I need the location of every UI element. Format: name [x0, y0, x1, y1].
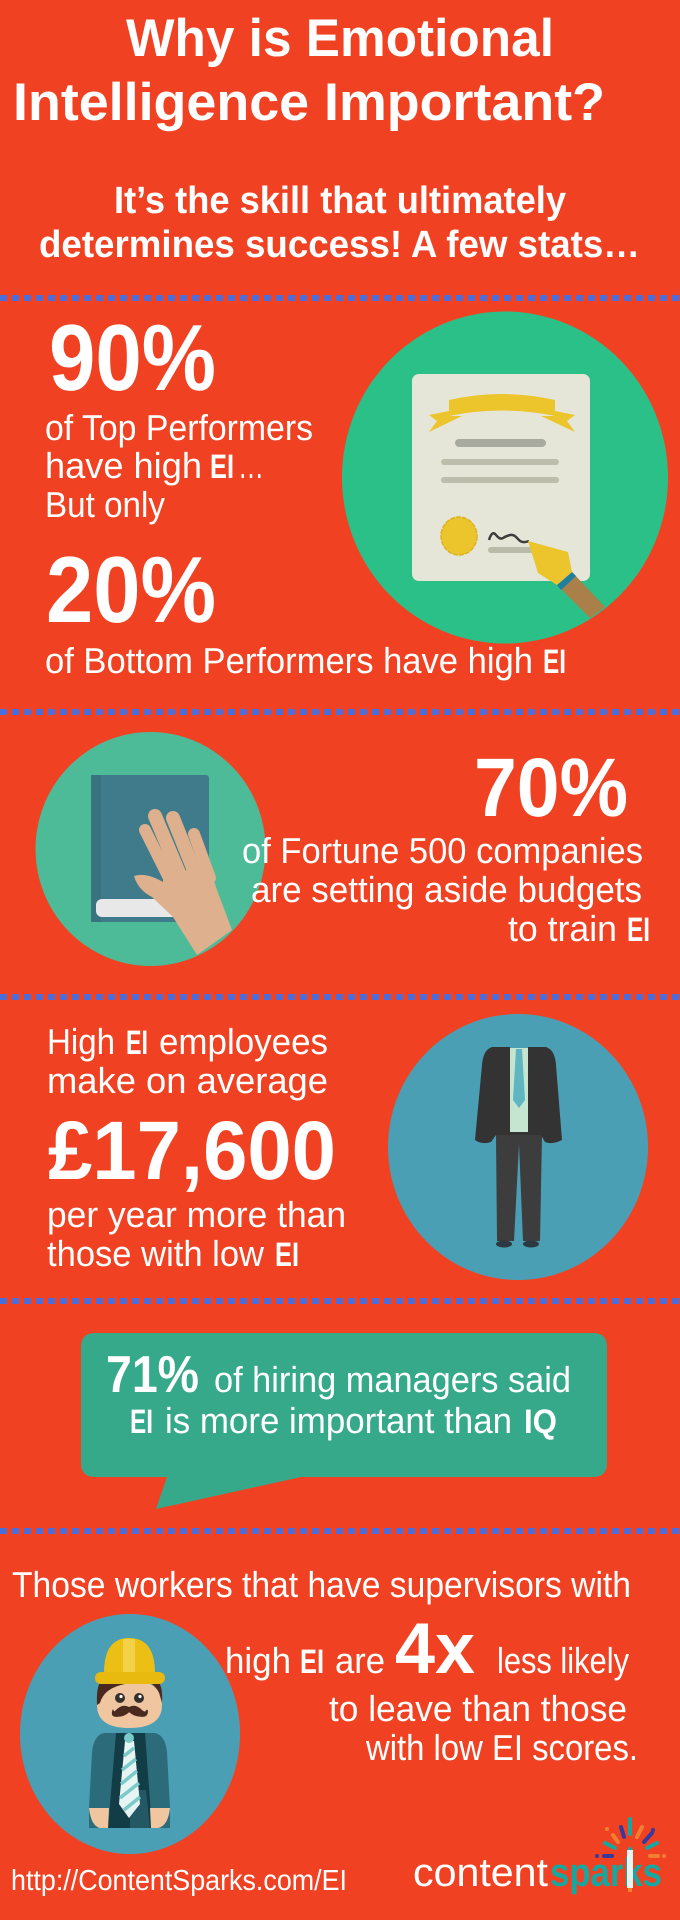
icon: construction worker in blue circle: [20, 1614, 240, 1854]
subtitle: [39, 180, 640, 266]
panel: top vs bottom performers text: [45, 305, 566, 681]
icon: suit in blue circle: [388, 1014, 648, 1280]
text: 4x less likely to leave: to leave than those: [329, 1688, 627, 1729]
text: website url: http://ContentSparks.com/EI: [11, 1865, 347, 1897]
text: of top performers: of Top Performers: [45, 407, 313, 448]
text: of top performers: have high: [45, 445, 202, 486]
text: of bottom performers: of Bottom Performers have high: [45, 640, 533, 681]
text: high EI employees: make on average: [47, 1060, 328, 1101]
title: Intelligence Important?: [13, 73, 605, 132]
text: high EI employees: [47, 1021, 328, 1101]
icon: hand on book in green circle: [36, 732, 266, 966]
text: of top performers: EI: [210, 448, 234, 486]
stat: 71%: 71%: [106, 1346, 199, 1404]
text: of top performers: [45, 407, 313, 525]
text: per year more: [47, 1194, 346, 1274]
callout: hiring managers speech bubble: of hiring managers said: [214, 1359, 571, 1400]
text: high EI employees: EI: [126, 1024, 148, 1062]
text: 4x less likely to leave: high: [225, 1640, 291, 1681]
text: fortune 500 budgets: are setting aside budgets: [251, 869, 642, 910]
stat: 70%: 70%: [474, 741, 628, 834]
text: 4x less likely to leave: are: [335, 1640, 385, 1681]
text: fortune 500 budgets: [242, 830, 650, 949]
callout: hiring managers speech bubble: is more important than: [165, 1400, 512, 1441]
panel: fortune 500 text: [242, 741, 650, 949]
callout: hiring managers speech bubble: EI: [130, 1403, 153, 1441]
stat: £17,600: £17,600: [48, 1104, 336, 1197]
logo: contentsparks: [413, 1819, 666, 1895]
text: supervisors intro line: Those workers that have supervisors with: [12, 1564, 631, 1605]
text: per year more: EI: [275, 1236, 299, 1274]
text: per year more: per year more than: [47, 1194, 346, 1235]
text: fortune 500 budgets: of Fortune 500 companies: [242, 830, 643, 871]
stat: 4x: 4x: [395, 1609, 475, 1689]
text: 4x less likely to leave: [225, 1609, 638, 1768]
callout: hiring managers speech bubble: IQ: [524, 1403, 557, 1441]
text: of bottom performers: EI: [543, 643, 566, 681]
text: fortune 500 budgets: to train: [508, 908, 617, 949]
subtitle: determines success! A few stats…: [39, 224, 640, 266]
stat: 20%: 20%: [46, 537, 216, 642]
text: fortune 500 budgets: EI: [627, 911, 650, 949]
title: Why is Emotional: [126, 9, 554, 68]
icon: certificate and pen in green circle: [342, 312, 668, 644]
title: [13, 9, 605, 132]
callout: hiring managers speech bubble: [81, 1333, 607, 1509]
text: 4x less likely to leave: EI: [300, 1643, 324, 1681]
panel: salary text: [47, 1021, 346, 1274]
logo: contentsparks: content: [413, 1851, 548, 1895]
logo: contentsparks: sparks: [550, 1851, 662, 1895]
text: per year more: those with low: [47, 1233, 265, 1274]
subtitle: It’s the skill that ultimately: [114, 180, 566, 222]
stat: 90%: 90%: [49, 305, 216, 410]
text: high EI employees: High: [47, 1021, 115, 1062]
text: of top performers: But only: [45, 484, 165, 525]
text: 4x less likely to leave: with low EI scores.: [365, 1727, 638, 1768]
text: high EI employees: employees: [159, 1021, 328, 1062]
text: 4x less likely to leave: less likely: [497, 1640, 629, 1681]
text: of top performers: …: [238, 445, 264, 486]
